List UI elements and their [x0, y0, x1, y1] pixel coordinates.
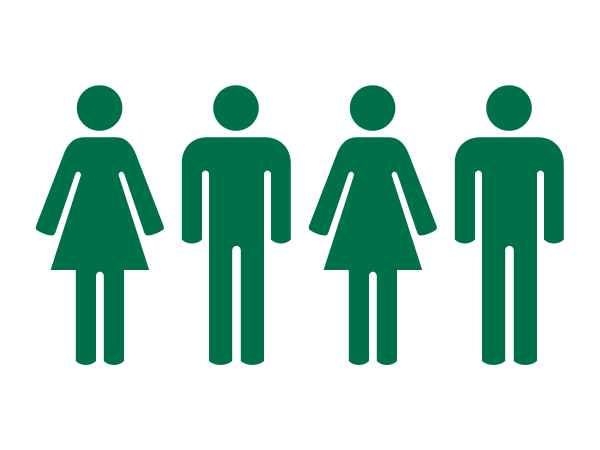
icon: woman 1: [36, 85, 164, 365]
icon: woman 2: [309, 85, 437, 365]
icon: man 1: [182, 85, 291, 365]
icon: man 2: [455, 85, 564, 365]
